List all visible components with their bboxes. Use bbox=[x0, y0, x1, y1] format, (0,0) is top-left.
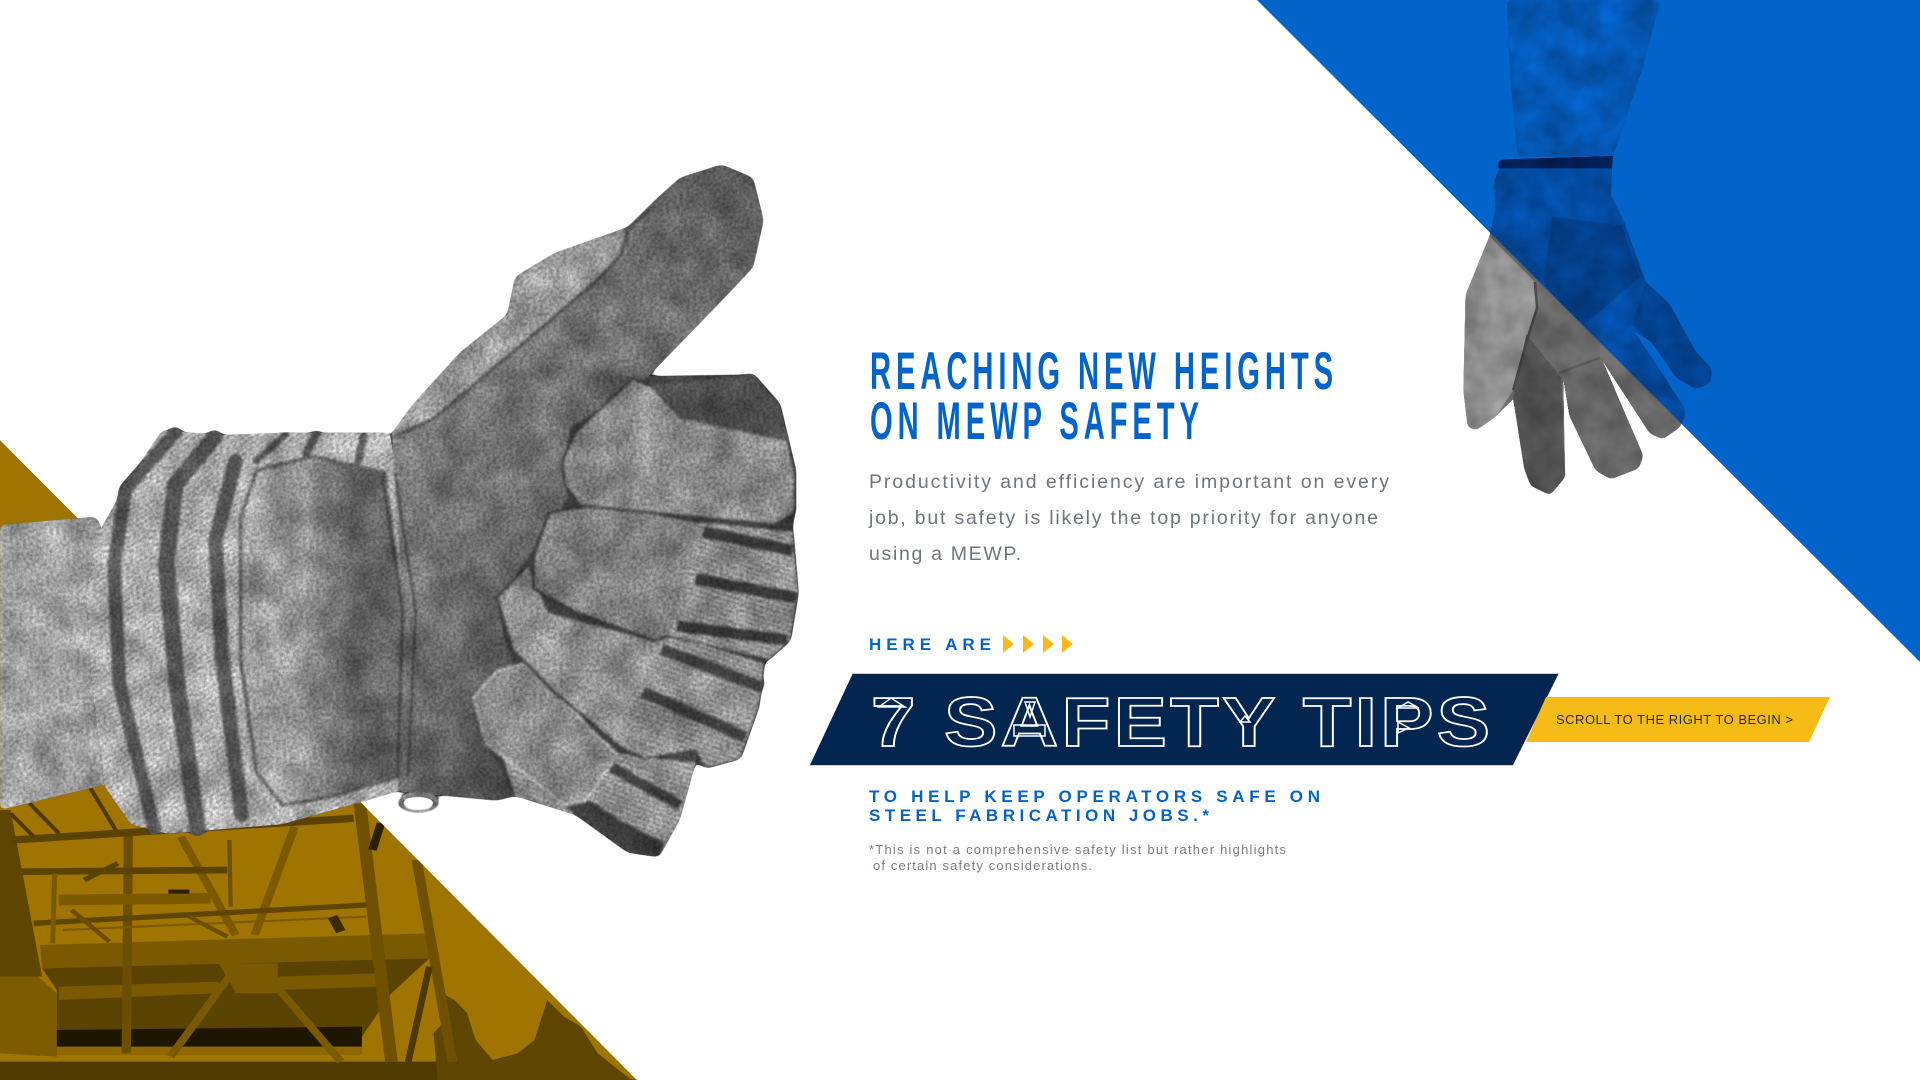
photo: gloved hand giving thumbs up bbox=[0, 165, 798, 857]
blue tinted arm and glove bbox=[1490, 0, 1712, 424]
subheading bbox=[869, 787, 1320, 825]
body paragraph bbox=[868, 471, 1389, 565]
subheading: STEEL FABRICATION JOBS.* bbox=[869, 806, 1209, 825]
body paragraph: Productivity and efficiency are important on every bbox=[869, 471, 1389, 493]
gold triangle with steel structure photo bbox=[0, 440, 640, 1080]
decorative overlap marks in banner letters bbox=[879, 698, 1419, 736]
body paragraph: using a MEWP. bbox=[869, 543, 1021, 565]
subheading: TO HELP KEEP OPERATORS SAFE ON bbox=[869, 787, 1320, 806]
grey glove palm bbox=[1463, 167, 1712, 495]
banner title outlined: 7 SAFETY TIPS bbox=[871, 683, 1490, 761]
footnote bbox=[869, 842, 1286, 873]
blue triangle bbox=[1257, 0, 1920, 662]
heading: ON MEWP SAFETY bbox=[870, 392, 1199, 451]
here are label: HERE ARE bbox=[869, 635, 991, 654]
icon: open work glove and arm, grey and blue duotone bbox=[1463, 0, 1712, 495]
callout: scroll button: SCROLL TO THE RIGHT TO BEGIN > bbox=[1556, 712, 1793, 727]
footnote: of certain safety considerations. bbox=[873, 858, 1092, 873]
callout: scroll button bbox=[1526, 697, 1830, 742]
icon: four yellow arrows bbox=[1003, 635, 1073, 653]
banner: navy bbox=[810, 673, 1559, 766]
heading bbox=[870, 342, 1333, 451]
heading: REACHING NEW HEIGHTS bbox=[870, 342, 1333, 401]
cuff, palm and fingers bbox=[86, 165, 798, 857]
full hand silhouette base bbox=[392, 165, 798, 857]
body paragraph: job, but safety is likely the top priority for anyone bbox=[868, 507, 1378, 529]
bare forearm bbox=[0, 517, 136, 810]
footnote: *This is not a comprehensive safety list but rather highlights bbox=[869, 842, 1286, 857]
lower finger knit cuff bbox=[502, 744, 696, 857]
